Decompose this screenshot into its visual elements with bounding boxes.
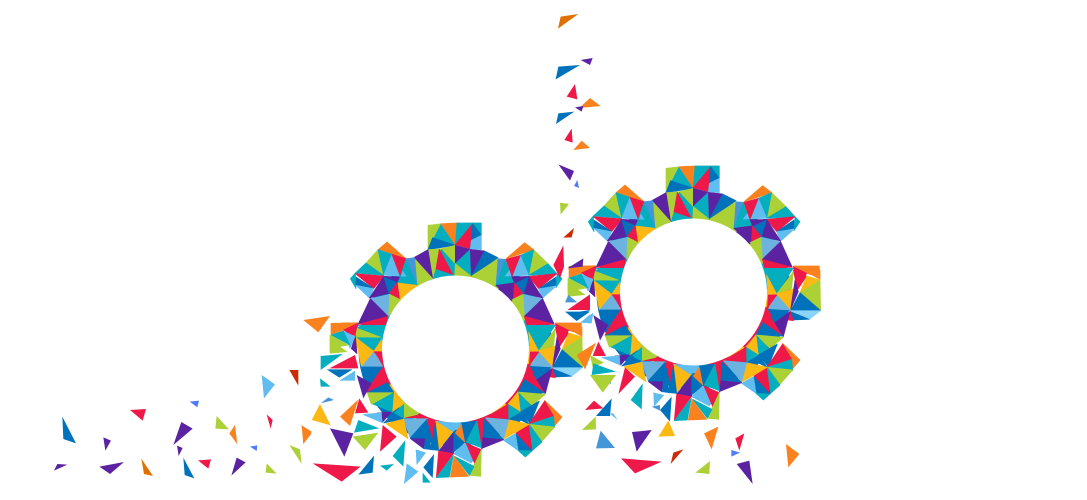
gear: lower left xyxy=(330,223,583,478)
triangles: fragments below the lower gear xyxy=(302,354,434,484)
triangles: trail rising above the gears xyxy=(553,14,601,278)
gear: upper right xyxy=(568,166,821,421)
triangles: fragments between the gears xyxy=(303,294,590,332)
triangles: fragments below the upper gear xyxy=(577,310,664,409)
triangles: scattered pieces below the upper gear xyxy=(582,397,799,484)
triangles: far left scatter xyxy=(54,370,312,478)
